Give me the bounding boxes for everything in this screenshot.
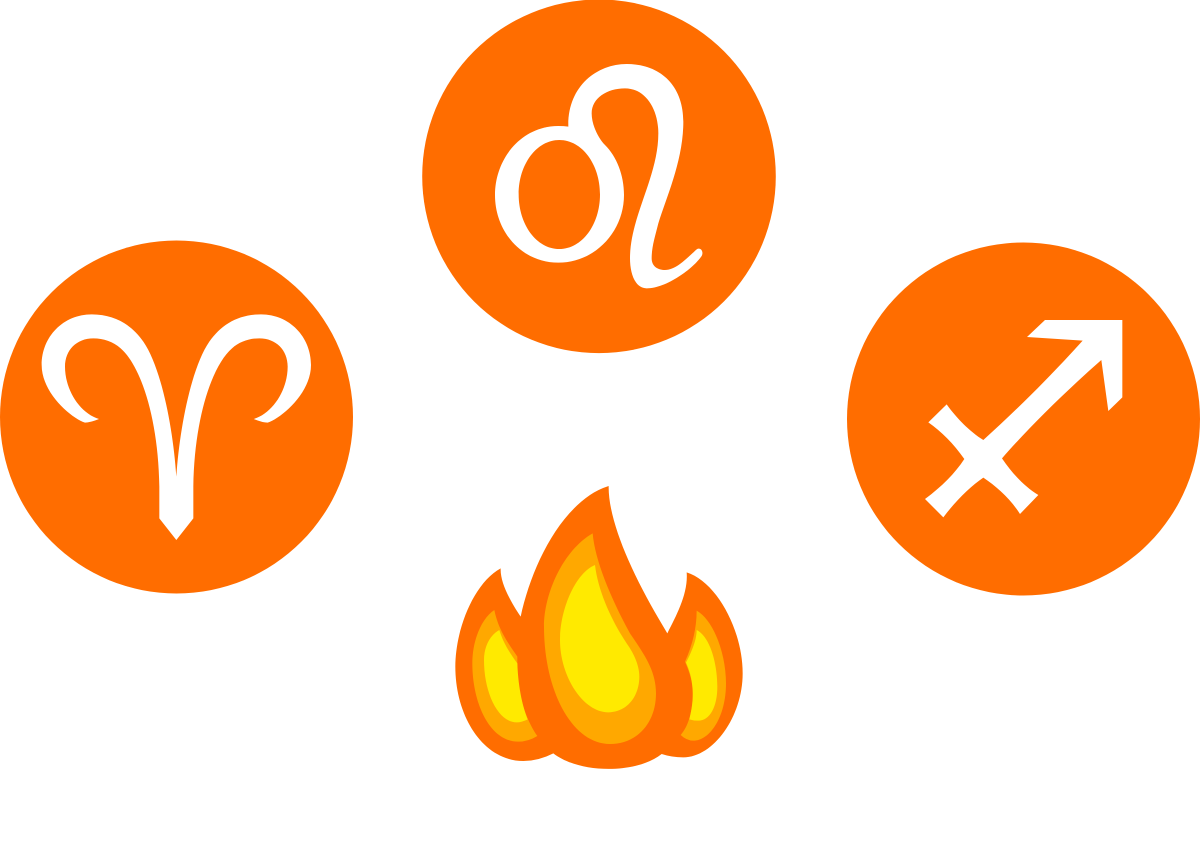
icon: Aries sign in orange circle: [0, 240, 353, 594]
flame: left orange layer: [472, 610, 537, 742]
flame: left yellow core: [484, 630, 528, 722]
flame: centre orange layer: [544, 533, 656, 744]
icon: Sagittarius sign in orange circle: [847, 242, 1200, 596]
icon: flame: [455, 486, 743, 769]
flame: outer silhouette: [455, 486, 743, 769]
flame: right orange layer: [681, 611, 726, 741]
flame: centre yellow core: [560, 565, 639, 712]
flame: right yellow core: [686, 630, 717, 721]
icon: Leo sign in orange circle: [422, 0, 776, 353]
